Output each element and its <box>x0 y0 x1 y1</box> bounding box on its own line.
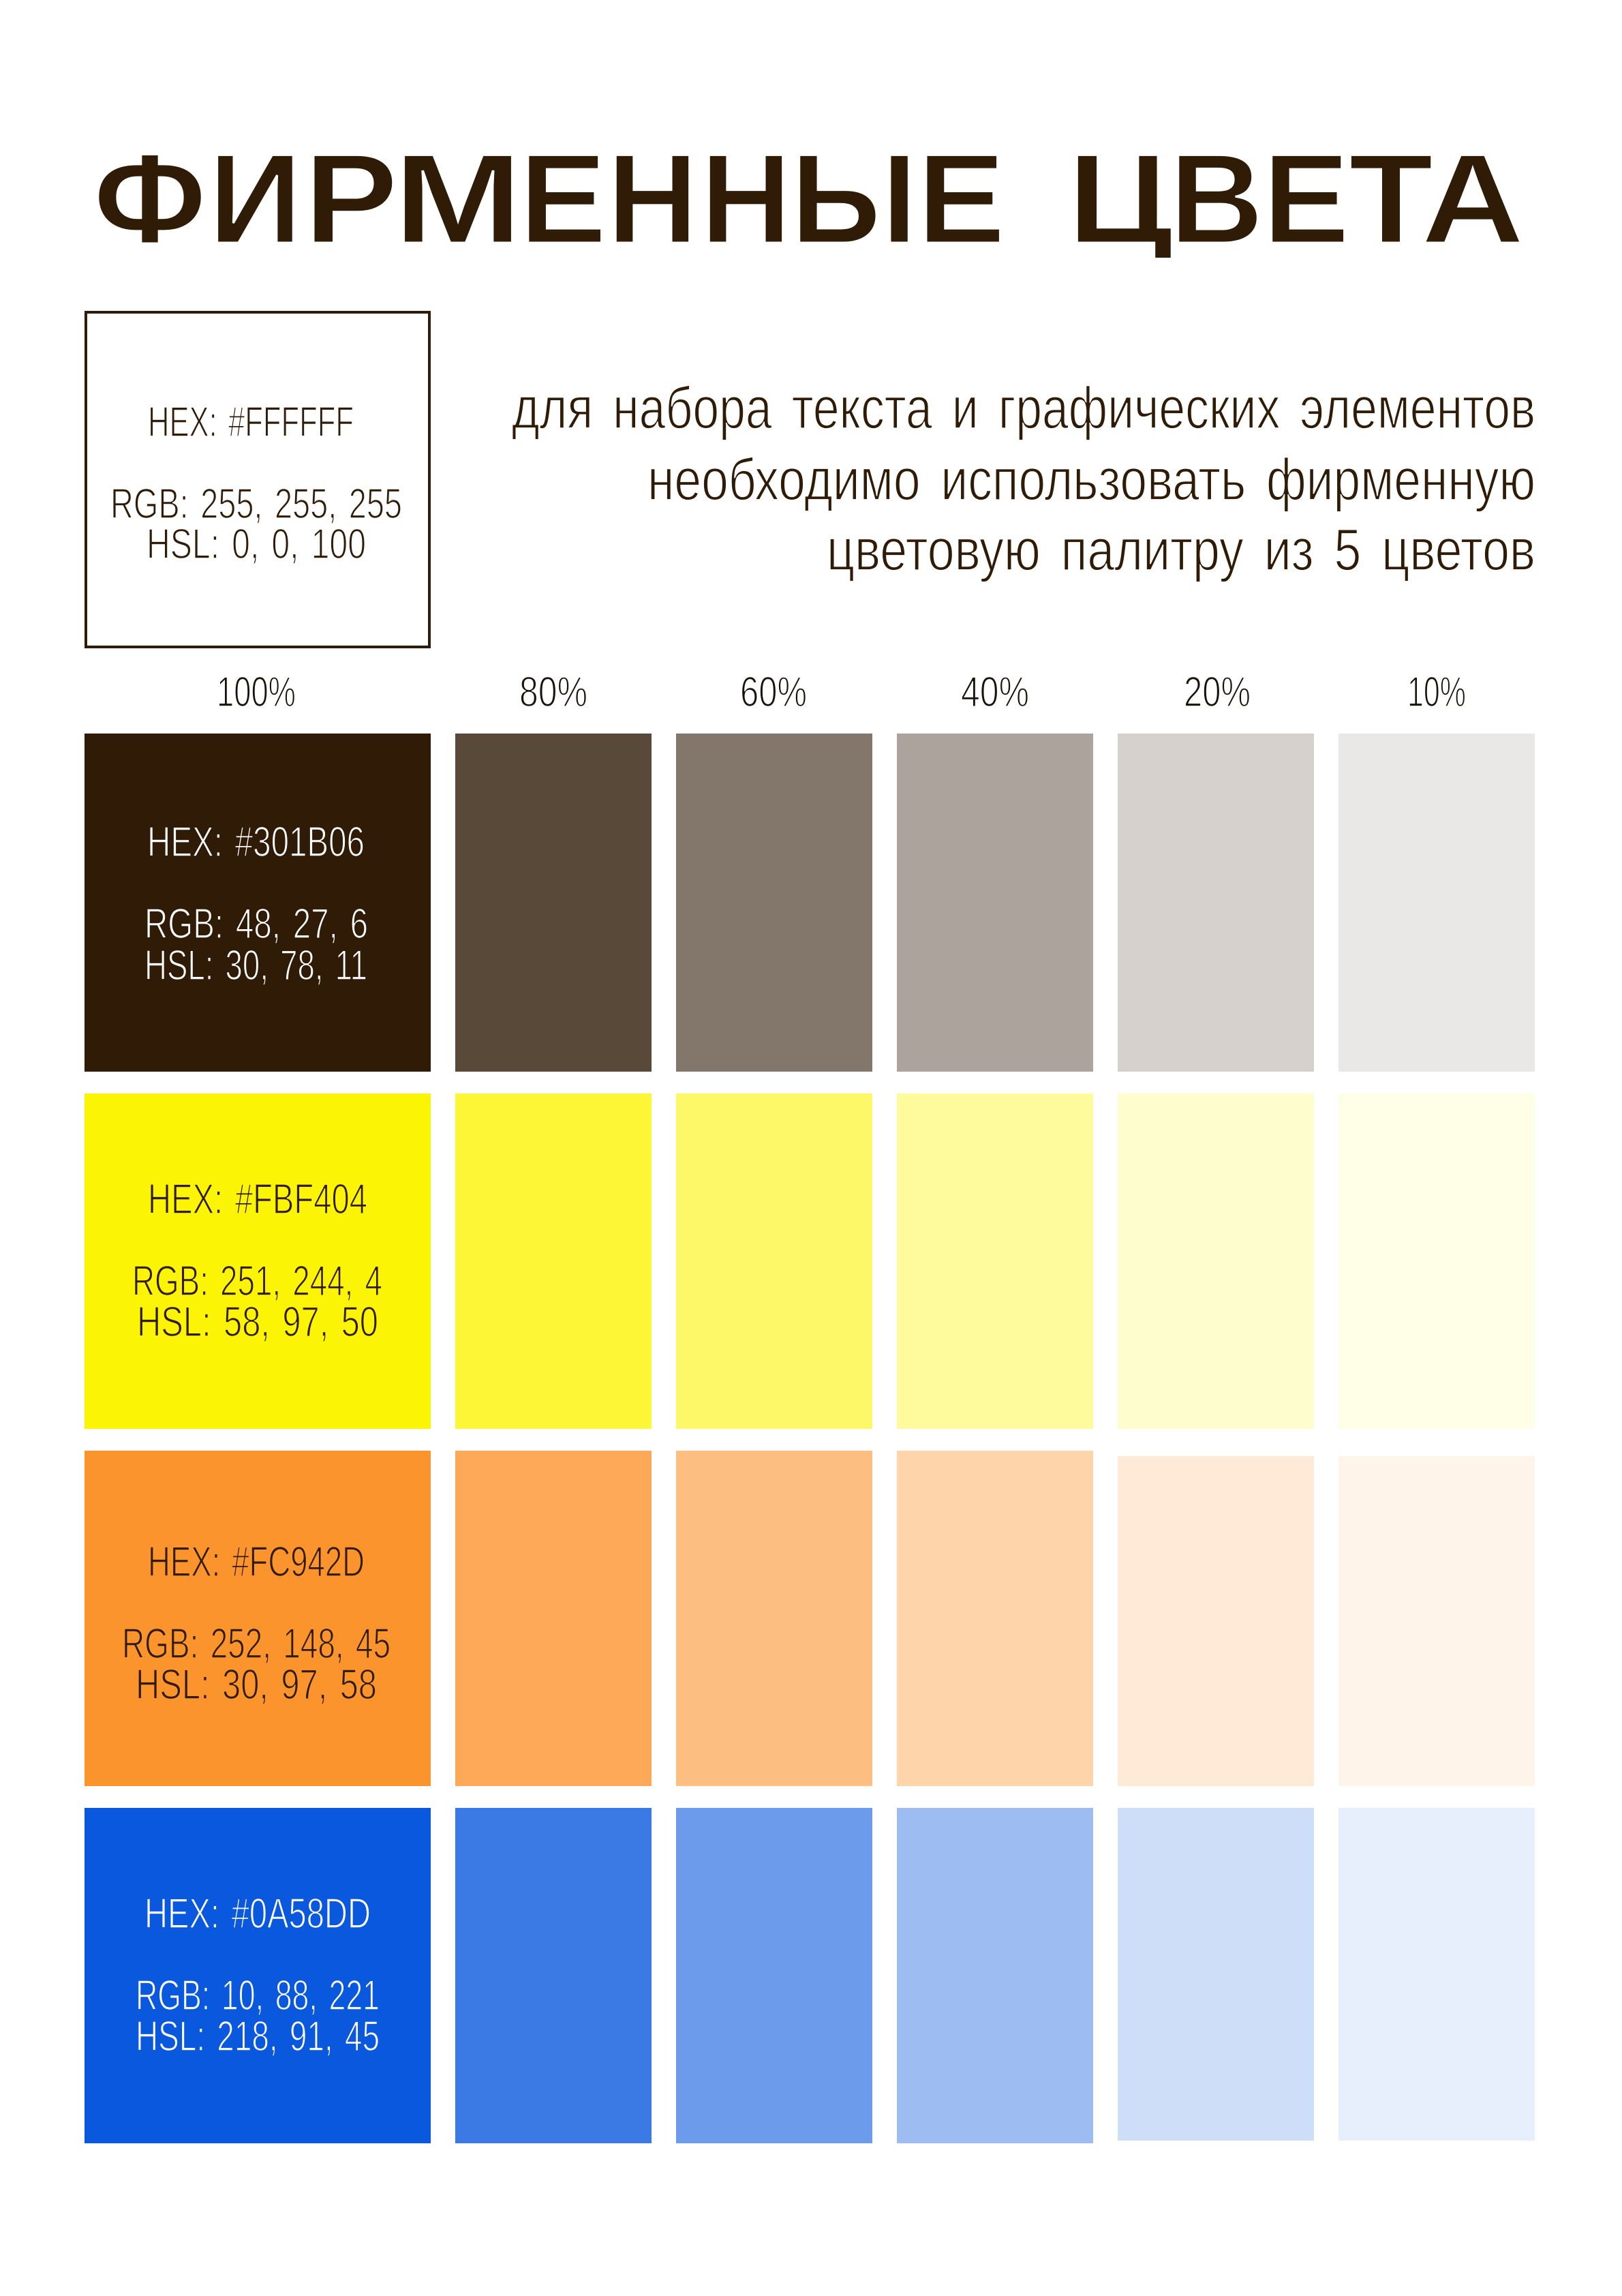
yellow base swatch with codes: HSL: 58, 97, 50 <box>137 1299 378 1346</box>
title: М <box>393 127 523 270</box>
title: Е <box>519 127 607 270</box>
panel: white colour swatch: HSL: 0, 0, 100 <box>147 521 366 568</box>
yellow base swatch with codes: RGB: 251, 244, 4 <box>132 1258 382 1305</box>
orange tints <box>455 1451 1535 1786</box>
brown tints <box>455 734 1535 1072</box>
panel: white colour swatch: HEX: #FFFFFF <box>148 399 354 446</box>
description text <box>512 376 1535 583</box>
orange base swatch with codes: HSL: 30, 97, 58 <box>136 1661 377 1708</box>
title: Р <box>304 127 398 270</box>
brown base swatch with codes: HEX: #301B06 <box>147 819 365 866</box>
brown base swatch with codes: RGB: 48, 27, 6 <box>144 901 368 948</box>
blue base swatch with codes: HSL: 218, 91, 45 <box>136 2013 380 2060</box>
orange base swatch with codes: HEX: #FC942D <box>148 1539 365 1586</box>
yellow tints <box>455 1093 1535 1429</box>
yellow base swatch with codes: HEX: #FBF404 <box>148 1176 367 1223</box>
title: Н <box>701 127 791 270</box>
tint percentage labels: 20% <box>1184 669 1251 716</box>
blue base swatch with codes <box>85 1808 431 2143</box>
title: Е <box>1263 127 1349 270</box>
title: Е <box>917 127 1005 270</box>
title: Ф <box>93 127 206 270</box>
yellow base swatch with codes <box>85 1093 431 1429</box>
brown base swatch with codes <box>85 734 431 1072</box>
tint percentage labels: 60% <box>740 669 807 716</box>
panel: yellow palette row <box>85 1093 1535 1429</box>
title: Н <box>607 127 698 270</box>
title: Т <box>1349 127 1433 270</box>
title: Ц <box>1067 127 1173 270</box>
blue base swatch with codes: RGB: 10, 88, 221 <box>136 1972 380 2019</box>
panel: white colour swatch: RGB: 255, 255, 255 <box>110 481 402 528</box>
tint percentage labels: 40% <box>961 669 1029 716</box>
panel: white colour swatch <box>86 312 429 647</box>
panel: brown palette row <box>85 734 1535 1072</box>
tint percentage labels: 80% <box>519 669 587 716</box>
title: А <box>1421 127 1525 270</box>
blue tints <box>455 1808 1535 2143</box>
title: Ы <box>791 127 917 270</box>
tint percentage labels <box>217 669 1466 716</box>
blue base swatch with codes: HEX: #0A58DD <box>144 1890 371 1937</box>
tint percentage labels: 100% <box>217 669 296 716</box>
panel: blue palette row <box>85 1808 1535 2143</box>
title: И <box>209 127 302 270</box>
orange base swatch with codes <box>85 1451 431 1786</box>
title: В <box>1169 127 1264 270</box>
brown base swatch with codes: HSL: 30, 78, 11 <box>144 942 367 989</box>
tint percentage labels: 10% <box>1407 669 1466 716</box>
orange base swatch with codes: RGB: 252, 148, 45 <box>122 1620 391 1667</box>
infographic canvas <box>85 155 1535 2143</box>
panel: orange palette row <box>85 1451 1535 1786</box>
